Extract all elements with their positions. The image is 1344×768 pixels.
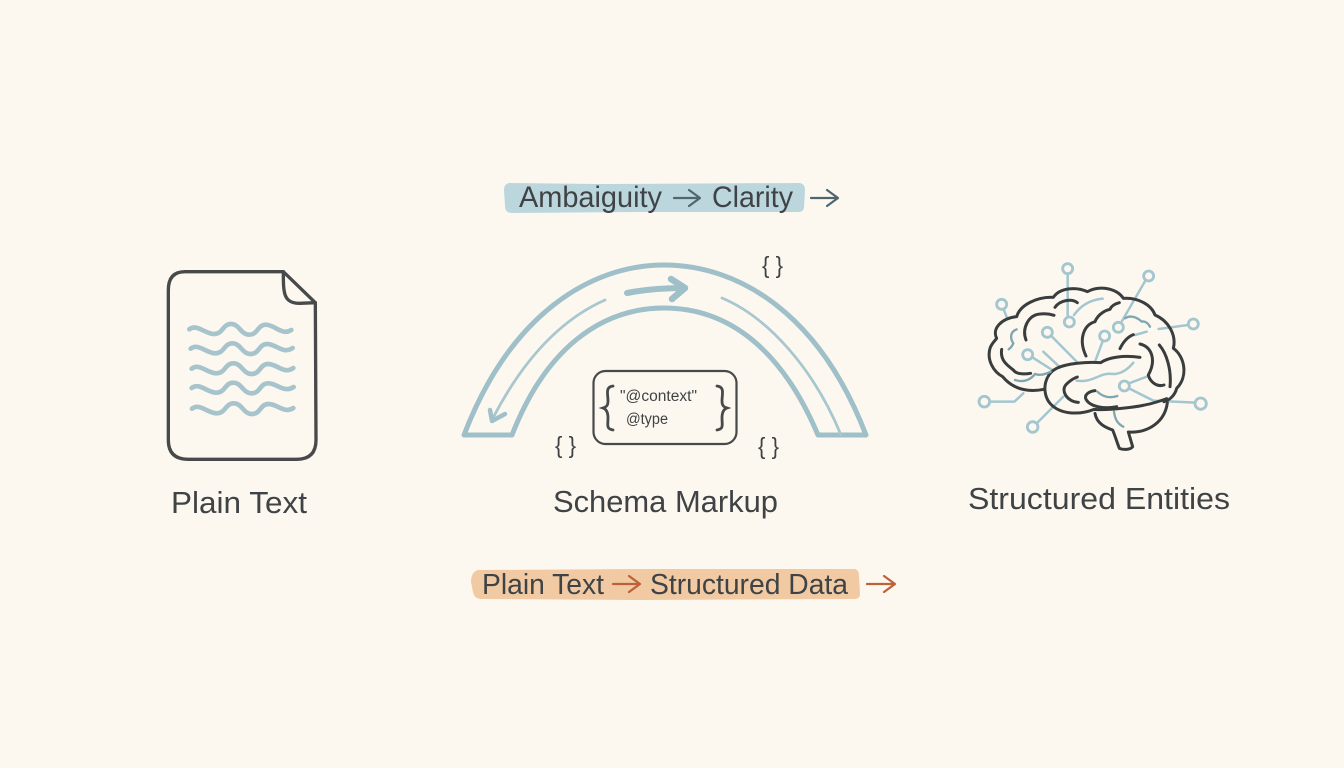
banner: ambiguity to clarity	[504, 181, 838, 214]
text: Plain Text: Plain Text	[482, 569, 604, 601]
curve: right thin line	[722, 298, 841, 435]
arrow: left returning	[493, 300, 605, 418]
arrow: outer blue	[811, 190, 838, 206]
icon: document with wavy lines	[168, 272, 316, 459]
arrow: outer orange	[867, 576, 895, 592]
code box	[594, 371, 736, 444]
network lines	[990, 274, 1195, 423]
brace: bottom left: { }	[555, 432, 576, 458]
arch with arrows	[464, 265, 866, 435]
arrow: inner blue	[674, 190, 700, 206]
panel: structured entities	[968, 264, 1230, 516]
code: type: @type	[626, 411, 668, 428]
icon: brain network	[979, 264, 1206, 449]
label: Plain Text: Plain Text	[171, 486, 308, 520]
brain outline	[989, 288, 1184, 449]
arch: outer and inner bands	[464, 265, 866, 435]
panel: plain text document	[168, 272, 316, 520]
network nodes	[979, 264, 1206, 432]
blue folds	[1009, 317, 1150, 427]
text: Clarity: Clarity	[712, 181, 793, 214]
label: Structured Entities: Structured Entities	[968, 482, 1230, 516]
highlight: blue brush	[504, 183, 805, 213]
banner: plain text to structured data	[471, 569, 895, 601]
box outline	[594, 371, 736, 444]
arrowhead: left returning	[490, 410, 505, 421]
arrow: top forward	[627, 288, 685, 293]
right brace	[717, 386, 727, 430]
left brace	[603, 386, 613, 430]
label: Schema Markup: Schema Markup	[553, 485, 778, 519]
arrow: inner orange	[613, 576, 640, 592]
code: context: "@context"	[620, 388, 697, 405]
text: Ambaiguity: Ambaiguity	[519, 181, 662, 214]
brace: bottom right: { }	[758, 433, 779, 459]
panel: schema markup	[464, 252, 866, 519]
highlight: orange brush	[471, 569, 860, 600]
text: Structured Data: Structured Data	[650, 569, 848, 601]
brace: top right: { }	[762, 252, 783, 278]
arrowhead: top forward	[671, 279, 685, 299]
